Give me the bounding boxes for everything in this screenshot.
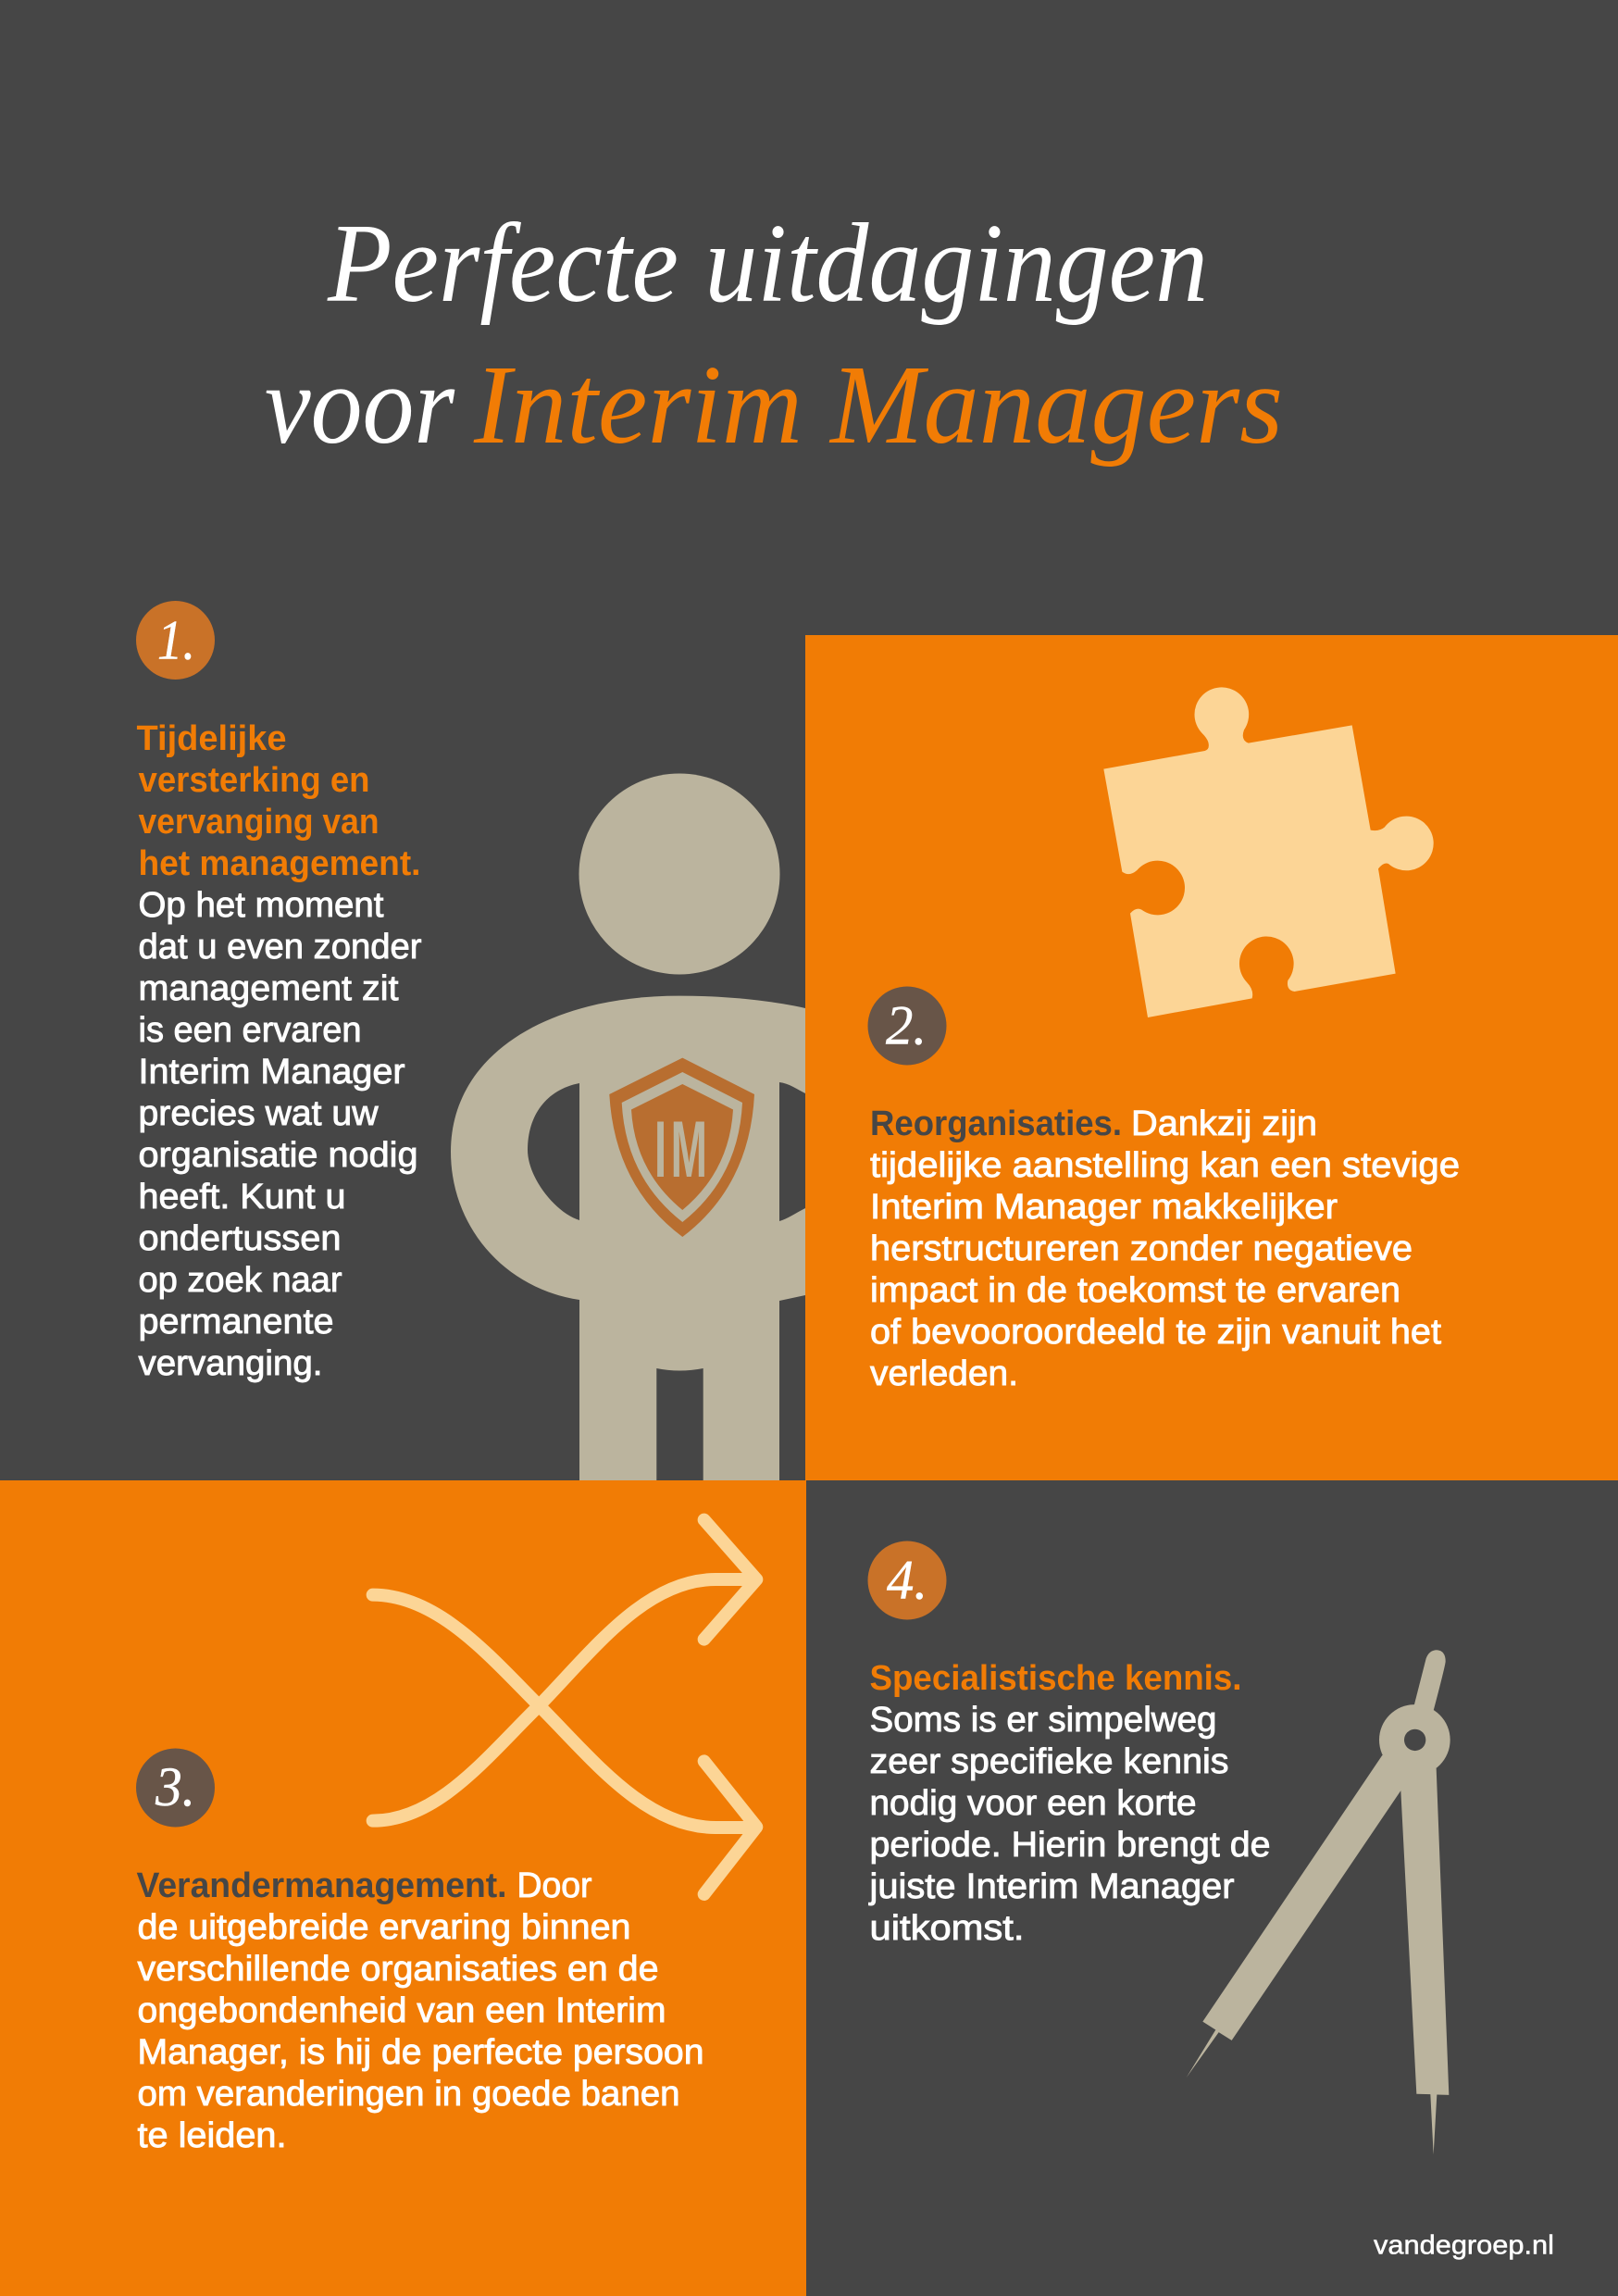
text block: panel 2: tijdelijke aanstelling kan een stevige bbox=[870, 1146, 1460, 1185]
title bbox=[265, 201, 1283, 468]
badge: 3 bbox=[136, 1748, 215, 1828]
text block: panel 4: nodig voor een korte bbox=[870, 1784, 1196, 1823]
text block: panel 1: Tijdelijke bbox=[137, 719, 287, 758]
text block: panel 2: impact in de toekomst te ervaren bbox=[870, 1271, 1400, 1310]
text block: panel 4: zeer specifieke kennis bbox=[870, 1742, 1229, 1781]
text block: panel 3: de uitgebreide ervaring binnen bbox=[137, 1908, 631, 1947]
text block: panel 1: het management. bbox=[139, 844, 420, 883]
text block: panel 1: versterking en bbox=[139, 761, 370, 800]
title: Perfecte uitdagingen bbox=[327, 201, 1208, 326]
text block: panel 2 bbox=[870, 1104, 1460, 1393]
text block: panel 1: op zoek naar bbox=[139, 1261, 342, 1300]
text block: panel 1: Interim Manager bbox=[139, 1053, 405, 1092]
badge: 4 bbox=[868, 1541, 946, 1620]
icon: person with shield: I bbox=[654, 1104, 666, 1194]
badge: 3: 3. bbox=[155, 1756, 195, 1817]
badge: 2: 2. bbox=[886, 995, 927, 1056]
text block: panel 2: verleden. bbox=[870, 1354, 1018, 1393]
text block: panel 1: precies wat uw bbox=[139, 1094, 379, 1133]
badge: 2 bbox=[868, 987, 946, 1065]
panel: 3 orange background bbox=[0, 1480, 806, 2296]
text block: panel 1: dat u even zonder bbox=[139, 928, 422, 967]
icon: person with shield: M bbox=[671, 1104, 707, 1194]
text block: panel 4: periode. Hierin brengt de bbox=[870, 1826, 1270, 1865]
text block: panel 3: Door bbox=[517, 1866, 592, 1905]
text block: panel 1: permanente bbox=[139, 1303, 333, 1341]
title: Interim Managers bbox=[473, 343, 1283, 468]
panel: 2 orange background bbox=[805, 635, 1618, 1480]
text block: panel 4: juiste Interim Manager bbox=[868, 1867, 1235, 1906]
text block: panel 2: of bevooroordeeld te zijn vanuit het bbox=[870, 1313, 1441, 1352]
text block: panel 4: Soms is er simpelweg bbox=[870, 1701, 1216, 1740]
icon: person with shield bbox=[451, 774, 805, 1480]
title: voor bbox=[265, 343, 454, 468]
text block: panel 4 bbox=[868, 1659, 1270, 1948]
footer url: vandegroep.nl bbox=[1374, 2231, 1554, 2261]
text block: panel 1: management zit bbox=[139, 969, 399, 1008]
text block: panel 4: uitkomst. bbox=[870, 1909, 1024, 1948]
icon: drawing compass bbox=[1187, 1650, 1450, 2154]
text block: panel 3: te leiden. bbox=[137, 2116, 287, 2155]
text block: panel 1: vervanging. bbox=[139, 1344, 322, 1383]
text block: panel 4: Specialistische kennis. bbox=[870, 1659, 1242, 1698]
text block: panel 2: Reorganisaties. bbox=[870, 1104, 1122, 1143]
text block: panel 3: ongebondenheid van een Interim bbox=[137, 1991, 666, 2030]
text block: panel 1: vervanging van bbox=[139, 803, 380, 842]
text block: panel 1: heeft. Kunt u bbox=[139, 1178, 346, 1217]
text block: panel 1: organisatie nodig bbox=[139, 1136, 418, 1175]
icon: puzzle piece bbox=[1103, 687, 1434, 1017]
text block: panel 3: om veranderingen in goede banen bbox=[137, 2075, 679, 2114]
text block: panel 1: Op het moment bbox=[139, 886, 384, 925]
badge: 1 bbox=[136, 601, 215, 680]
text block: panel 3: verschillende organisaties en de bbox=[137, 1950, 659, 1989]
text block: panel 1: is een ervaren bbox=[139, 1011, 361, 1050]
text block: panel 2: Interim Manager makkelijker bbox=[870, 1188, 1338, 1227]
text block: panel 1 bbox=[137, 719, 422, 1383]
badge: 4: 4. bbox=[887, 1550, 927, 1611]
text block: panel 2: Dankzij zijn bbox=[1131, 1104, 1317, 1143]
text block: panel 3: Manager, is hij de perfecte persoon bbox=[137, 2033, 703, 2072]
text block: panel 2: herstructureren zonder negatieve bbox=[870, 1229, 1413, 1268]
icon: crossing arrows bbox=[373, 1520, 756, 1894]
badge: 1: 1. bbox=[157, 609, 195, 670]
text block: panel 1: ondertussen bbox=[139, 1219, 341, 1258]
text block: panel 3 bbox=[137, 1866, 703, 2155]
text block: panel 3: Verandermanagement. bbox=[137, 1866, 507, 1905]
